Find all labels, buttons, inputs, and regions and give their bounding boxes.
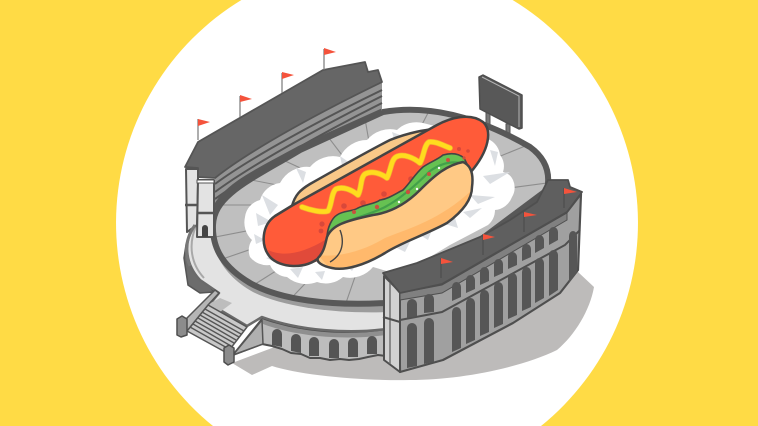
stadium bowl <box>210 106 552 307</box>
hot dog <box>264 117 488 280</box>
lower arcade wall <box>233 319 386 360</box>
back grandstand <box>185 48 382 266</box>
back flags <box>198 48 336 140</box>
paper doily <box>244 122 515 284</box>
facade <box>399 194 581 372</box>
scoreboard <box>479 75 522 138</box>
stair pillar right <box>224 345 234 365</box>
front roof <box>383 180 582 293</box>
ground shadow <box>232 272 594 380</box>
front grandstand <box>383 180 582 372</box>
lower arches <box>407 231 577 368</box>
white circle <box>116 0 638 426</box>
upper arches <box>407 227 558 318</box>
stair pillar left <box>177 316 187 337</box>
front flags <box>441 188 577 278</box>
arches lower arcade <box>272 329 377 358</box>
concourse deck <box>187 226 386 331</box>
left towers <box>185 169 214 266</box>
mustard <box>302 142 450 212</box>
cornice <box>400 213 567 300</box>
front bun <box>318 162 480 280</box>
left lower dark arcade wall <box>184 245 214 293</box>
seating tiers <box>214 82 382 210</box>
middle band <box>400 230 580 320</box>
lettuce <box>327 154 470 238</box>
illustration: hot dog in a stadium <box>116 0 638 426</box>
roof <box>185 62 382 178</box>
stadium bowl outer band <box>213 200 420 312</box>
tower door <box>202 225 208 237</box>
back bun <box>292 128 440 206</box>
staircase <box>177 290 247 365</box>
left corner pillars <box>384 276 400 372</box>
sausage <box>264 117 488 266</box>
paper folds <box>254 132 510 280</box>
